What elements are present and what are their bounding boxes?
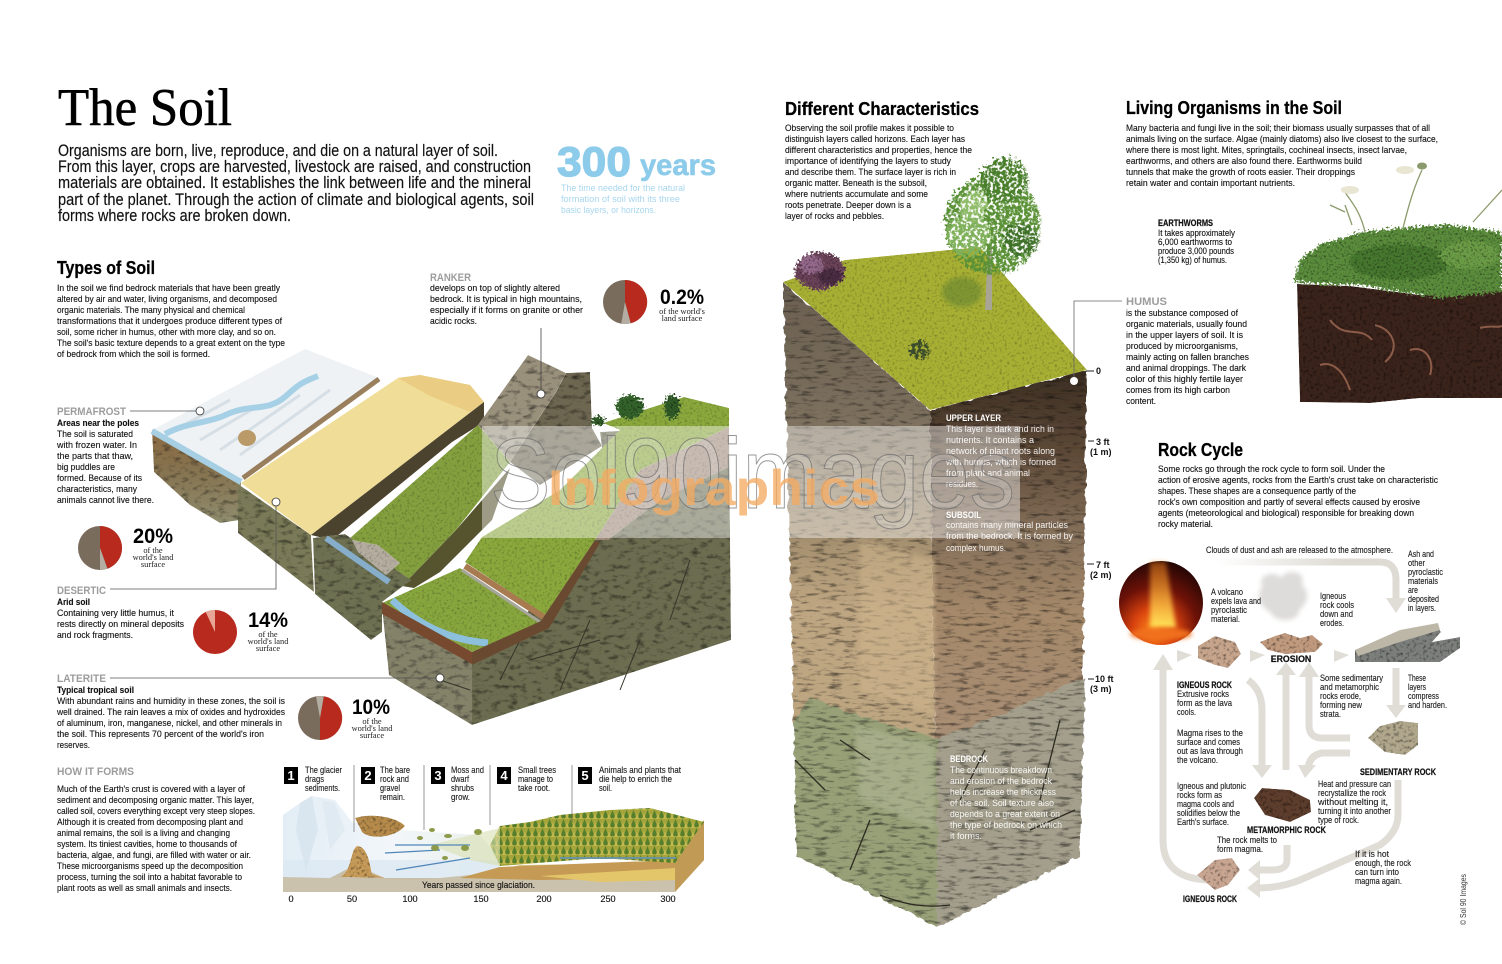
step 1: sediments. xyxy=(305,783,340,793)
text: humus: color of this highly fertile layer xyxy=(1126,374,1243,384)
white text: upper layer: UPPER LAYER xyxy=(946,412,1001,423)
text: living organisms: retain water and contain important nutrients. xyxy=(1126,178,1295,188)
cycle labels: enough, the rock xyxy=(1355,858,1411,868)
step 3: 3 xyxy=(434,768,442,783)
landscape illustration xyxy=(283,796,704,892)
text: humus: HUMUS xyxy=(1126,296,1167,308)
timeline axis labels: 300 xyxy=(660,894,676,904)
label: desertic: Arid soil xyxy=(57,597,90,607)
text: different characteristics: roots penetrate. Deeper down is a xyxy=(785,200,912,210)
pie chart: permafrost 20%: of the xyxy=(143,546,163,555)
label: laterite xyxy=(56,673,444,750)
white text: bedrock: it forms. xyxy=(950,831,982,841)
text: different characteristics: and describe them. The surface layer is rich in xyxy=(785,167,956,177)
pie chart: permafrost 20%: surface xyxy=(141,560,165,569)
heading: different characteristics: Different Characteristics xyxy=(785,98,979,119)
timeline axis labels: 150 xyxy=(473,894,489,904)
cycle labels: other xyxy=(1408,558,1425,568)
cycle labels: Earth's surface. xyxy=(1177,817,1229,827)
text: how it forms: These microorganisms speed up the decomposition xyxy=(57,861,243,871)
label: desertic: rests directly on mineral deposits xyxy=(57,619,184,629)
pie chart: ranker 0.2%: 0.2% xyxy=(660,286,704,309)
panel: how it forms xyxy=(57,765,704,904)
depth scale: (1 m) xyxy=(1090,447,1112,457)
label: desertic: and rock fragments. xyxy=(57,630,133,640)
pie chart: laterite 10%: world's land xyxy=(352,724,393,733)
depth scale: 10 ft xyxy=(1095,674,1114,684)
label: laterite: With abundant rains and humidity in these zones, the soil is xyxy=(57,696,285,706)
cycle labels: down and xyxy=(1320,609,1353,619)
pie chart: ranker 0.2%: land surface xyxy=(662,314,703,323)
label: desertic xyxy=(57,498,280,640)
watermark: Infographics xyxy=(548,460,880,516)
step 5: 5 xyxy=(581,768,589,783)
rock: erosion xyxy=(1260,633,1323,654)
bush xyxy=(795,252,845,290)
cycle labels: The rock melts to xyxy=(1217,835,1277,845)
depth scale: (3 m) xyxy=(1090,684,1112,694)
pie chart: desertic 14%: world's land xyxy=(248,637,289,646)
text: different characteristics: layer of rocks and pebbles. xyxy=(785,211,884,221)
label: ranker: develops on top of slightly altered xyxy=(430,283,560,293)
depth scale xyxy=(1086,366,1114,694)
step 1 xyxy=(284,765,342,793)
text: types of soil: transformations that it undergoes produce different types of xyxy=(57,316,282,326)
text: how it forms: animal remains, the soil is a living and changing xyxy=(57,828,230,838)
text: types of soil: of bedrock from which the soil is formed. xyxy=(57,349,210,359)
white text: subsoil: SUBSOIL xyxy=(946,509,981,520)
label: permafrost xyxy=(56,406,204,505)
rock: sedimentary layers xyxy=(1355,623,1460,662)
label: permafrost: animals cannot live there. xyxy=(57,495,154,505)
heading: how it forms: HOW IT FORMS xyxy=(57,766,134,778)
cycle labels: pyroclastic xyxy=(1211,605,1247,615)
pie chart: permafrost 20% xyxy=(78,525,174,570)
text: types of soil xyxy=(57,283,285,359)
step 5: Animals and plants that xyxy=(599,765,681,775)
step 3: shrubs xyxy=(451,783,474,793)
white text: bedrock: helps increase the thickness xyxy=(950,787,1056,797)
white text: subsoil: contains many mineral particles xyxy=(946,520,1068,530)
step 5: die help to enrich the xyxy=(599,774,672,784)
pie chart: laterite 10%: of the xyxy=(362,717,382,726)
cycle labels: are xyxy=(1408,585,1418,595)
text: humus: in the upper layers of soil. It is xyxy=(1126,330,1243,340)
label: laterite: the soil. This represents 70 percent of the world's iron xyxy=(57,729,264,739)
cycle labels: out as lava through xyxy=(1177,746,1243,756)
text: types of soil: The soil's basic texture depends to a great extent on the type xyxy=(57,338,285,348)
cycle labels: can turn into xyxy=(1355,867,1399,877)
step 1: The glacier xyxy=(305,765,342,775)
panel: living organisms xyxy=(1070,97,1502,406)
text: rock cycle xyxy=(1158,464,1438,529)
pie chart: laterite 10%: 10% xyxy=(352,696,390,719)
credit: © Sol 90 Images xyxy=(1459,874,1468,925)
timeline axis labels: 50 xyxy=(347,894,357,904)
pie chart: desertic 14%: 14% xyxy=(248,609,288,632)
cycle labels: Some sedimentary xyxy=(1320,673,1383,683)
step 5 xyxy=(578,765,681,793)
text: humus: and animal droppings. The dark xyxy=(1126,363,1246,373)
text: how it forms: plant roots as well as small animals and insects. xyxy=(57,883,232,893)
white text: bedrock xyxy=(950,753,1062,841)
watermark: Sol90images xyxy=(490,418,1015,530)
text: rock cycle: rock's own composition and partly of several effects caused by erosive xyxy=(1158,497,1420,507)
cycle labels: rocks form as xyxy=(1177,790,1222,800)
text: earthworms: 6,000 earthworms to xyxy=(1158,237,1232,247)
label: ranker: RANKER xyxy=(430,272,471,284)
step 3: dwarf xyxy=(451,774,469,784)
step 2: The bare xyxy=(380,765,410,775)
cycle labels: and harden. xyxy=(1408,700,1447,710)
cycle labels: pyroclastic xyxy=(1408,567,1443,577)
cycle labels: strata. xyxy=(1320,709,1341,719)
label: permafrost: The soil is saturated xyxy=(57,429,133,439)
step 1: drags xyxy=(305,774,324,784)
intro text: Organisms are born, live, reproduce, and die on a natural layer of soil. xyxy=(58,142,498,160)
intro text: part of the planet. Through the action of climate and biological agents, soil xyxy=(58,191,534,209)
step 5: soil. xyxy=(599,783,612,793)
cycle labels: A volcano xyxy=(1211,587,1243,597)
text: humus: is the substance composed of xyxy=(1126,308,1238,318)
text: humus xyxy=(1070,296,1249,406)
text: earthworms xyxy=(1158,218,1235,265)
cycle labels: Clouds of dust and ash are released to the atmosphere. xyxy=(1206,545,1393,555)
cycle labels: Igneous xyxy=(1320,591,1346,601)
white text: upper layer: residues. xyxy=(946,479,978,489)
permafrost block xyxy=(152,349,379,523)
intro text: materials are obtained. It establishes the link between life and the mineral xyxy=(58,174,531,192)
step 4: manage to xyxy=(518,774,553,784)
heading: living organisms: Living Organisms in the Soil xyxy=(1126,97,1342,118)
cycle labels: If it is hot xyxy=(1355,849,1389,859)
label: permafrost: Areas near the poles xyxy=(57,418,139,428)
icon: volcano xyxy=(1119,561,1203,645)
text: living organisms xyxy=(1125,123,1438,188)
label: desertic: DESERTIC xyxy=(57,585,106,597)
cycle labels: Magma rises to the xyxy=(1177,728,1243,738)
timeline axis labels xyxy=(288,894,676,904)
text: living organisms: earthworms, and others are also found there. Earthworms build xyxy=(1126,156,1362,166)
text: how it forms: process, turning the soil into a habitat favorable to xyxy=(57,872,242,882)
text: humus: comes from its high carbon xyxy=(1126,385,1230,395)
cycle labels: in layers. xyxy=(1408,603,1436,613)
caption: years passed: Years passed since glaciation. xyxy=(422,880,535,890)
arrowheads xyxy=(1153,598,1406,898)
pie chart: permafrost 20%: world's land xyxy=(133,553,174,562)
white text: subsoil: from the bedrock. It is formed by xyxy=(946,531,1073,541)
depth scale: 3 ft xyxy=(1096,437,1110,447)
cycle labels: form magma. xyxy=(1217,844,1263,854)
text: different characteristics: distinguish layers called horizons. Each layer has xyxy=(785,134,965,144)
step 2: 2 xyxy=(364,768,372,783)
callout: 300 years xyxy=(557,138,716,215)
pie chart: desertic 14% xyxy=(193,609,289,654)
text: humus: content. xyxy=(1126,396,1156,406)
text: humus: produced by microorganisms, xyxy=(1126,341,1238,351)
heading: types of soil: Types of Soil xyxy=(57,257,155,278)
intro text: forms where rocks are broken down. xyxy=(58,207,291,225)
cycle labels: magma cools and xyxy=(1177,799,1234,809)
white text: bedrock: the type of bedrock on which xyxy=(950,820,1062,830)
white text: upper layer: nutrients. It contains a xyxy=(946,435,1035,445)
label: laterite: LATERITE xyxy=(57,673,106,685)
cycle labels: materials xyxy=(1408,576,1438,586)
cycle labels: solidifies below the xyxy=(1177,808,1240,818)
white text: bedrock: The continuous breakdown xyxy=(950,765,1052,775)
white text: upper layer: with humus, which is formed xyxy=(945,457,1056,467)
text: living organisms: animals living on the surface. Algae (mainly diatoms) also live closest to the surface, xyxy=(1126,134,1438,144)
white text: bedrock: depends to a great extent on xyxy=(950,809,1060,819)
cycle labels xyxy=(1177,545,1447,904)
label: laterite: well drained. The rain leaves a mix of oxides and hydroxides xyxy=(56,707,285,717)
text: types of soil: altered by air and water, living organisms, and decomposed xyxy=(57,294,277,304)
cycle labels: surface and comes xyxy=(1177,737,1240,747)
pie chart: laterite 10% xyxy=(298,696,393,740)
icon: ash cloud xyxy=(1259,572,1307,620)
text: types of soil: soil, some richer in humus, other with more clay, and so on. xyxy=(57,327,276,337)
cycle labels: form as the lava xyxy=(1177,698,1232,708)
text: how it forms: sediment and decomposing organic matter. This layer, xyxy=(57,795,254,805)
text: different characteristics: where nutrients accumulate and some xyxy=(784,189,928,199)
depth scale: 0 xyxy=(1096,366,1101,376)
text: rock cycle: Some rocks go through the rock cycle to form soil. Under the xyxy=(1158,464,1385,474)
panel: types of soil xyxy=(56,257,731,750)
label: erosion: EROSION xyxy=(1271,654,1311,664)
white text: subsoil xyxy=(946,509,1073,553)
cycle labels: expels lava and xyxy=(1211,596,1261,606)
text: rock cycle: agents (meteorological and biological) responsible for breaking down xyxy=(1158,508,1414,518)
step 3 xyxy=(431,765,484,802)
pie chart: permafrost 20%: 20% xyxy=(133,525,173,548)
text: earthworms: EARTHWORMS xyxy=(1158,218,1213,228)
cycle labels: layers xyxy=(1408,682,1426,692)
text: how it forms xyxy=(57,784,255,893)
cycle labels: IGNEOUS ROCK xyxy=(1183,894,1238,904)
cycle labels: material. xyxy=(1211,614,1240,624)
rock: sedimentary xyxy=(1368,721,1418,755)
cycle labels: These xyxy=(1408,673,1426,683)
cycle labels: Heat and pressure can xyxy=(1318,779,1391,789)
step 2: gravel xyxy=(380,783,400,793)
callout: 300 years: basic layers, or horizons. xyxy=(561,205,656,215)
cycle labels: SEDIMENTARY ROCK xyxy=(1360,767,1437,777)
cycle labels: deposited xyxy=(1408,594,1439,604)
cycle arrows xyxy=(1163,562,1398,888)
label: permafrost: characteristics, many xyxy=(57,484,137,494)
timeline axis labels: 0 xyxy=(288,894,294,904)
step 3: Moss and xyxy=(451,765,484,775)
step 1: 1 xyxy=(287,768,295,783)
text: different characteristics: Observing the soil profile makes it possible to xyxy=(785,123,954,133)
white text: subsoil: complex humus. xyxy=(946,543,1006,553)
white text: bedrock: and erosion of the bedrock xyxy=(950,776,1052,786)
text: different characteristics: importance of identifying the layers to study xyxy=(785,156,951,166)
cycle labels: cools. xyxy=(1177,707,1196,717)
label: laterite: Typical tropical soil xyxy=(57,685,134,695)
text: humus: organic materials, usually found xyxy=(1126,319,1247,329)
tree xyxy=(945,158,1041,310)
panel: different characteristics xyxy=(783,98,1114,927)
step 2 xyxy=(361,765,410,802)
text: how it forms: bacteria, algae, and fungi, are filled with water or air. xyxy=(57,850,251,860)
text: rock cycle: rocky material. xyxy=(1158,519,1213,529)
text: earthworms: (1,350 kg) of humus. xyxy=(1158,255,1227,265)
text: types of soil: In the soil we find bedrock materials that have been greatly xyxy=(57,283,280,293)
pie chart: ranker 0.2%: of the world's xyxy=(659,307,705,316)
title: The Soil xyxy=(58,79,232,137)
desertic block xyxy=(238,375,484,592)
text: how it forms: system. Its tiniest cavities, home to thousands of xyxy=(57,839,237,849)
text: earthworms: produce 3,000 pounds xyxy=(1158,246,1234,256)
text: living organisms: Many bacteria and fungi live in the soil; their biomass usually surpasses that of all xyxy=(1126,123,1430,133)
depth scale: 7 ft xyxy=(1096,560,1110,570)
cycle labels: erodes. xyxy=(1320,618,1344,628)
cycle labels: magma again. xyxy=(1355,876,1402,886)
cycle labels: forming new xyxy=(1320,700,1362,710)
intro text: From this layer, crops are harvested, livestock are raised, and construction xyxy=(58,158,531,176)
white text: upper layer: from plant and animal xyxy=(946,468,1030,478)
pie chart: ranker 0.2% xyxy=(603,280,705,324)
cycle labels: the volcano. xyxy=(1177,755,1218,765)
label: ranker: especially if it forms on granite or other xyxy=(430,305,583,315)
callout: 300 years: formation of soil with its three xyxy=(561,194,680,204)
panel: rock cycle xyxy=(1119,439,1460,904)
cycle labels: and metamorphic xyxy=(1320,682,1379,692)
label: permafrost: formed. Because of its xyxy=(57,473,142,483)
label: ranker: acidic rocks. xyxy=(430,316,477,326)
rock: igneous bottom xyxy=(1197,858,1240,890)
pie chart: desertic 14%: surface xyxy=(256,644,280,653)
cycle labels: compress xyxy=(1408,691,1439,701)
white text: upper layer: This layer is dark and rich in xyxy=(946,424,1054,434)
label: ranker xyxy=(430,272,583,398)
timeline axis labels: 250 xyxy=(600,894,616,904)
step 2: rock and xyxy=(380,774,409,784)
text: how it forms: Although it is created from decomposing plant and xyxy=(57,817,243,827)
white text: bedrock: of the soil. Soil texture also xyxy=(950,798,1054,808)
text: living organisms: where there is most light. Mites, springtails, cochineal insects, insect larvae, xyxy=(1125,145,1407,155)
callout: 300 years: The time needed for the natural xyxy=(561,183,685,193)
text: how it forms: called soil, covers everything except very steep slopes. xyxy=(57,806,255,816)
pie chart: desertic 14%: of the xyxy=(258,630,278,639)
timeline axis labels: 100 xyxy=(402,894,418,904)
soil column block xyxy=(783,158,1087,927)
cycle labels: without melting it, xyxy=(1317,797,1388,807)
text: different characteristics: organic matter. Beneath is the subsoil, xyxy=(785,178,927,188)
cycle labels: IGNEOUS ROCK xyxy=(1177,680,1233,690)
white text: upper layer: network of plant roots along xyxy=(946,446,1055,456)
white text: upper layer xyxy=(945,412,1056,489)
text: rock cycle: shapes. These shapes are a consequence partly of the xyxy=(1158,486,1356,496)
white text: bedrock: BEDROCK xyxy=(950,753,988,764)
step 4: Small trees xyxy=(518,765,556,775)
cycle labels: recrystallize the rock xyxy=(1318,788,1386,798)
cycle labels: rock cools xyxy=(1320,600,1354,610)
callout: 300 years: 300 xyxy=(557,138,631,185)
soil and grass illustration xyxy=(1293,162,1502,403)
step 4: take root. xyxy=(518,783,550,793)
text: types of soil: organic materials. The many physical and chemical xyxy=(57,305,245,315)
cycle labels: METAMORPHIC ROCK xyxy=(1247,825,1327,835)
cycle labels: Igneous and plutonic xyxy=(1177,781,1246,791)
label: permafrost: PERMAFROST xyxy=(57,406,126,418)
cycle labels: rocks erode, xyxy=(1320,691,1361,701)
text: how it forms: Much of the Earth's crust is covered with a layer of xyxy=(57,784,245,794)
text: different characteristics xyxy=(784,123,972,221)
step 4: 4 xyxy=(500,768,508,783)
step 2: remain. xyxy=(380,792,405,802)
callout: 300 years: years xyxy=(640,149,716,182)
rock: igneous top xyxy=(1198,636,1241,668)
step 4 xyxy=(497,765,556,793)
rock: metamorphic xyxy=(1254,788,1311,822)
label: ranker: bedrock. It is typical in high mountains, xyxy=(430,294,582,304)
label: laterite: of aluminum, iron, manganese, nickel, and other minerals in xyxy=(57,718,282,728)
text: living organisms: tunnels that make the growth of roots easier. Their droppings xyxy=(1126,167,1355,177)
depth scale: (2 m) xyxy=(1090,570,1112,580)
cycle labels: Extrusive rocks xyxy=(1177,689,1229,699)
timeline axis labels: 200 xyxy=(536,894,552,904)
text: rock cycle: action of erosive agents, rocks from the Earth's crust take on characteristic xyxy=(1158,475,1438,485)
label: permafrost: with frozen water. In xyxy=(56,440,137,450)
intro text xyxy=(58,142,534,225)
text: different characteristics: different characteristics and properties, hence the xyxy=(785,145,972,155)
illustration: soil type blocks xyxy=(152,349,731,725)
label: permafrost: big puddles are xyxy=(57,462,115,472)
cycle labels: type of rock. xyxy=(1318,815,1359,825)
ranker block xyxy=(313,355,602,640)
cycle labels: Ash and xyxy=(1408,549,1434,559)
label: laterite: reserves. xyxy=(57,740,90,750)
heading: rock cycle: Rock Cycle xyxy=(1158,439,1243,460)
step 3: grow. xyxy=(451,792,470,802)
pie chart: laterite 10%: surface xyxy=(360,731,384,740)
label: permafrost: the parts that thaw, xyxy=(57,451,133,461)
text: earthworms: It takes approximately xyxy=(1158,228,1235,238)
laterite block xyxy=(382,395,731,725)
cycle labels: turning it into another xyxy=(1318,806,1391,816)
text: humus: mainly acting on fallen branches xyxy=(1126,352,1249,362)
label: desertic: Containing very little humus, it xyxy=(57,608,174,618)
